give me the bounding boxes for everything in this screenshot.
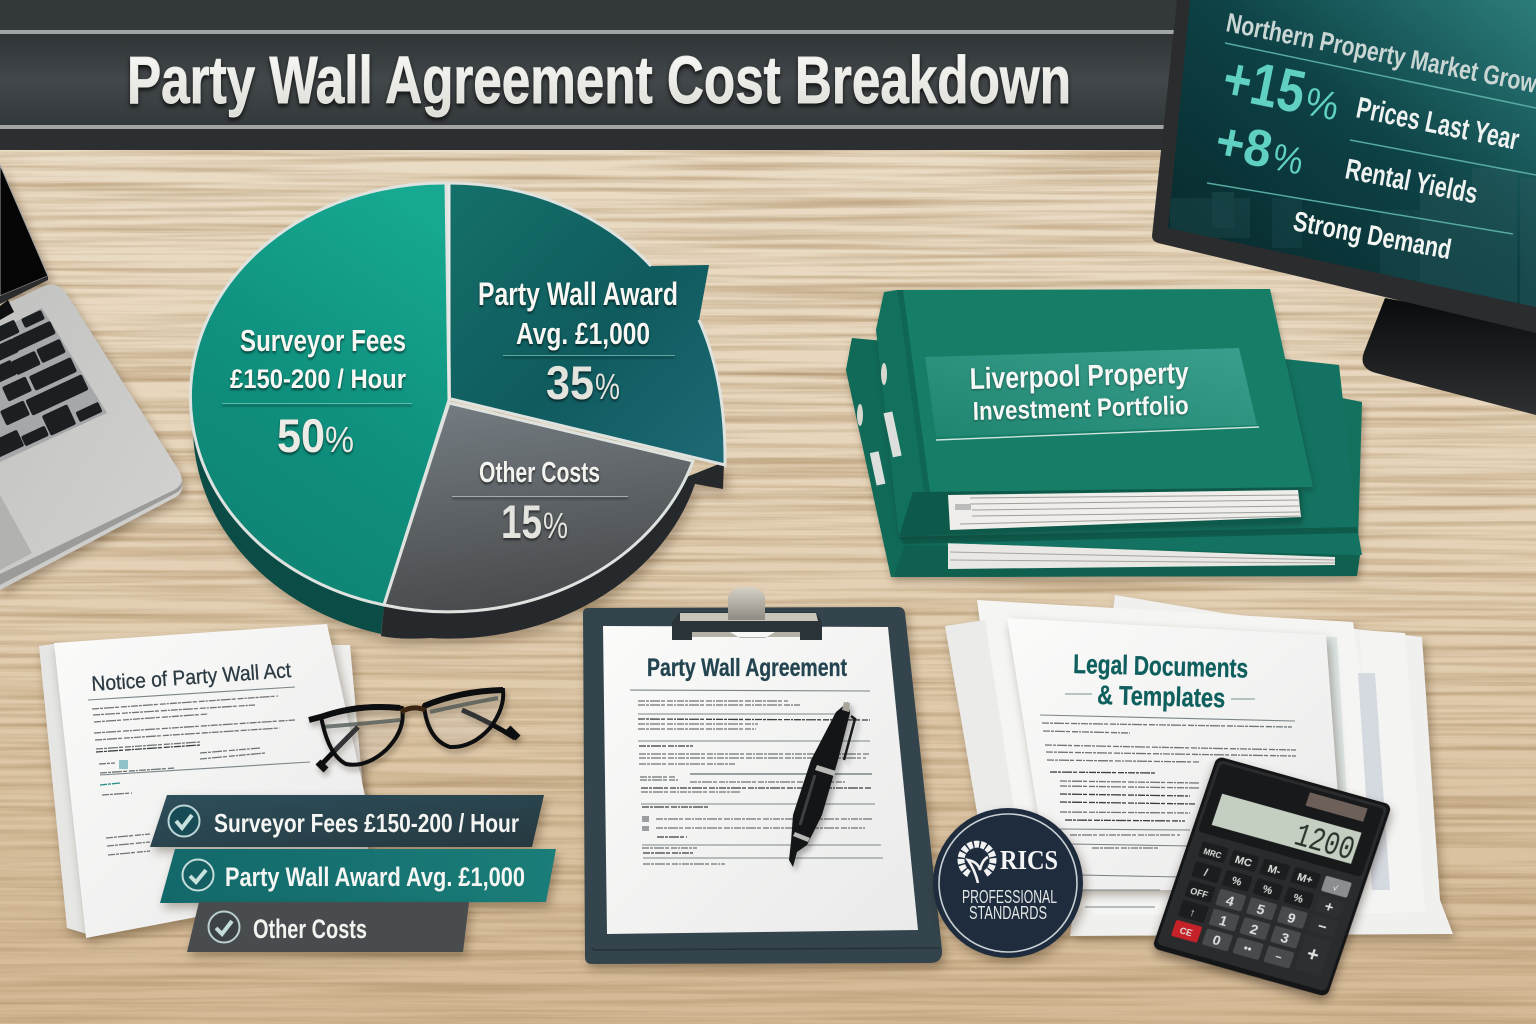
calculator keys: M+: [1295, 871, 1314, 887]
stat: +8%: %: [1269, 136, 1307, 184]
temple arms: [322, 698, 498, 727]
pie depth: [193, 397, 724, 639]
label: party wall award: [478, 276, 678, 409]
header band: [0, 0, 1180, 150]
calculator keys: OFF: [1189, 886, 1210, 900]
calculator display: [1212, 794, 1362, 864]
calculator keys: 2: [1248, 920, 1261, 938]
stat: rental yields: Rental Yields: [1343, 153, 1480, 210]
banner: other costs: [187, 902, 469, 952]
badge text: [962, 887, 1057, 923]
legal heading: [1065, 649, 1255, 713]
binders: [846, 289, 1362, 577]
label: party wall award: 35: [546, 356, 594, 409]
laptop base: [0, 284, 182, 590]
screen rules: [1207, 43, 1536, 234]
laptop: [0, 165, 182, 590]
banner: party wall award: [160, 849, 556, 903]
skyline on screen: [1170, 168, 1536, 308]
back sheets: [39, 643, 90, 935]
calculator keys: 9: [1285, 909, 1298, 926]
pen: [789, 702, 855, 867]
banner: surveyor fees: [150, 795, 544, 847]
binder inside: [899, 488, 1302, 536]
clipboard paper: [603, 626, 918, 934]
binder cover: [897, 289, 1313, 492]
solar panel: [1305, 792, 1368, 822]
calculator keys: MC: [1233, 854, 1254, 870]
label: surveyor fees: 50: [277, 409, 325, 462]
upper rims and hinges: [309, 690, 503, 720]
banner: other costs: Other Costs: [253, 914, 367, 944]
stat: +8%: +8: [1211, 112, 1277, 180]
legal heading: Legal Documents: [1073, 649, 1249, 684]
upper binder: [876, 289, 1313, 537]
legal documents stack: [945, 595, 1453, 936]
label: other costs: [452, 457, 628, 548]
stat: +15%: %: [1301, 80, 1343, 129]
front sheet: [54, 624, 370, 938]
front sheet: [1007, 618, 1345, 890]
lower binder pages: [948, 543, 1335, 569]
binder pages: [948, 490, 1301, 530]
binder spine: [876, 290, 924, 537]
display reading: 1200: [1289, 818, 1359, 869]
binder label text: Liverpool Property: [969, 357, 1189, 396]
clipboard board: [583, 607, 942, 964]
calculator keys: %: [1261, 883, 1274, 897]
calculator keys: 4: [1224, 892, 1237, 909]
stat: +8%: [1211, 112, 1309, 187]
RICS logo mark: [961, 844, 993, 883]
laptop screen: [0, 165, 48, 296]
label: surveyor fees: £150-200 / Hour: [230, 364, 406, 394]
calculator keys: ↑: [1188, 906, 1197, 919]
label: surveyor fees: %: [325, 419, 354, 460]
title: Party Wall Agreement Cost Breakdown: [127, 43, 1071, 118]
calculator keys: %: [1230, 875, 1243, 889]
pie chart: [190, 183, 725, 639]
clipboard: [583, 587, 942, 964]
monitor stand: [1362, 298, 1536, 415]
banner: party wall award: Party Wall Award Avg. £1,000: [225, 862, 525, 892]
glasses: [309, 690, 518, 770]
left lens: [321, 706, 403, 765]
pie divider: [448, 183, 450, 400]
monitor screen: [1168, 0, 1536, 307]
monitor: [1152, 0, 1536, 415]
badge text: STANDARDS: [969, 903, 1047, 923]
notice document: [39, 624, 370, 938]
label: party wall award: Party Wall Award: [478, 276, 678, 312]
label: other costs: %: [543, 505, 568, 546]
trackpad: [0, 495, 32, 570]
label: surveyor fees: [222, 323, 412, 462]
RICS badge: [933, 808, 1083, 958]
calculator keys: +: [1322, 898, 1336, 916]
label: party wall award: Avg. £1,000: [516, 316, 650, 351]
RICS wordmark: RICS: [1000, 845, 1058, 875]
calculator keys: 5: [1255, 901, 1267, 918]
calculator keys: −: [1315, 918, 1330, 936]
calculator keys: M-: [1266, 863, 1283, 878]
notice body text: [88, 687, 310, 855]
label: surveyor fees: Surveyor Fees: [240, 323, 406, 358]
right lens: [424, 690, 503, 747]
stat: strong demand: Strong Demand: [1291, 205, 1454, 265]
back sheets: [945, 595, 1453, 936]
monitor bezel: [1152, 0, 1536, 333]
label plate: [925, 348, 1257, 437]
calculator keys: √: [1332, 883, 1340, 893]
label: other costs: Other Costs: [479, 457, 600, 489]
slice: party wall award: [449, 183, 725, 465]
binder label text: [969, 357, 1189, 426]
laptop hinge: [0, 300, 14, 320]
middle cover: [899, 359, 1362, 555]
calculator keys: [1171, 841, 1352, 977]
lower binder: [846, 338, 1362, 577]
legal body text: [1040, 715, 1296, 907]
calculator keys: ••: [1242, 942, 1253, 956]
checklist banners: [150, 795, 556, 952]
legal heading: & Templates: [1097, 680, 1226, 713]
calculator keys: CE: [1178, 925, 1194, 938]
agreement body text: [630, 690, 883, 864]
label: party wall award: %: [595, 366, 620, 407]
calculator keys: −: [1273, 951, 1283, 964]
label: other costs: 15: [501, 495, 542, 548]
calculator keys: 0: [1210, 932, 1223, 949]
binder label text: Investment Portfolio: [972, 390, 1189, 426]
calculator keys: 3: [1279, 929, 1292, 946]
calculator keys: %: [1292, 892, 1305, 906]
stat: +15%: +15: [1217, 44, 1311, 126]
glasses bridge: [401, 708, 425, 712]
keyboard: [0, 308, 107, 462]
notice heading: Notice of Party Wall Act: [91, 659, 292, 696]
calculator keys: MRC: [1202, 847, 1223, 860]
badge text: PROFESSIONAL: [962, 887, 1057, 907]
slice: surveyor fees: [190, 183, 449, 605]
calculator: [1152, 756, 1392, 997]
calculator keys: +: [1304, 943, 1322, 967]
calculator keys: /: [1202, 867, 1209, 879]
calculator keys: 1: [1217, 912, 1230, 929]
clipboard clip: [672, 587, 822, 640]
agreement heading: Party Wall Agreement: [647, 654, 848, 682]
slice: other costs: [384, 403, 693, 612]
banner: surveyor fees: Surveyor Fees £150-200 / Hour: [214, 808, 519, 838]
